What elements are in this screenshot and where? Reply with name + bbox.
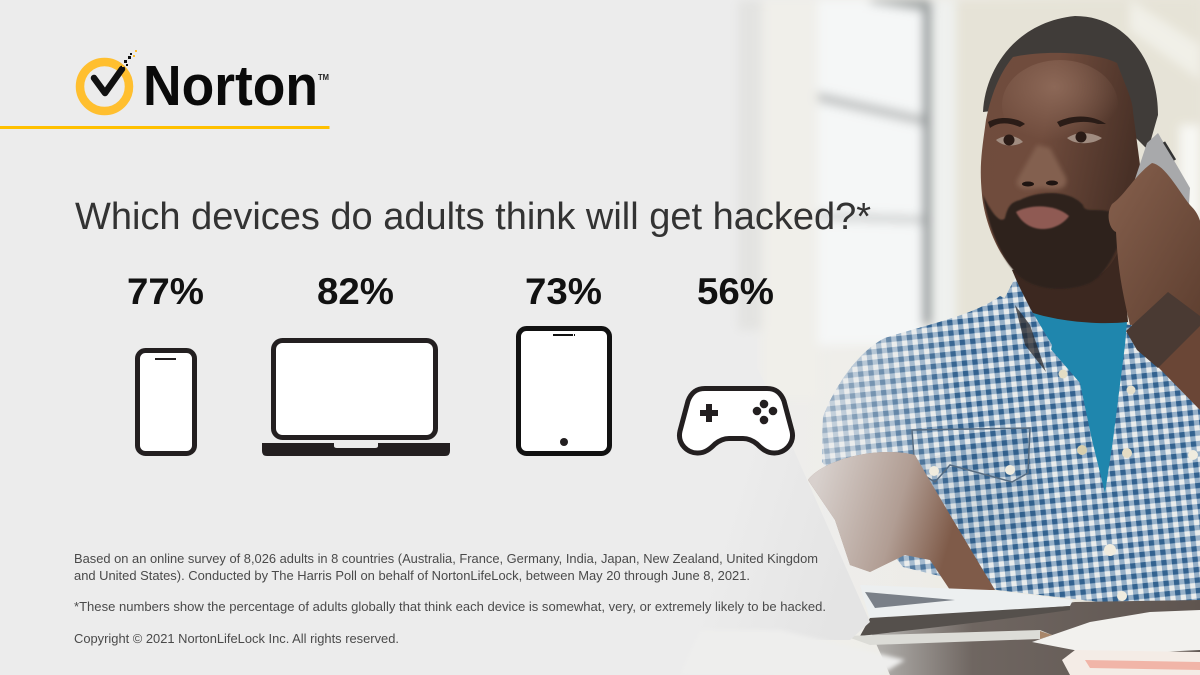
stat: tablet 73%: 73% [525, 271, 602, 312]
leather wristband [1126, 292, 1200, 368]
collar [988, 278, 1052, 375]
icon: tablet [518, 328, 610, 454]
laptop lid [600, 318, 870, 640]
title: Which devices do adults think will get hacked?* [75, 196, 871, 238]
head [981, 53, 1140, 287]
t-shirt [1027, 308, 1127, 493]
stat: phone 77%: 77% [127, 271, 204, 312]
stat: game console 56%: 56% [697, 271, 774, 312]
footnote: asterisk: *These numbers show the percentage of adults globally that think each device is somewhat, very, or extremely likely to be hacked. [74, 599, 826, 614]
yellow rule [0, 126, 330, 129]
nose [1017, 145, 1066, 189]
mouth [1016, 206, 1069, 229]
copyright: Copyright © 2021 NortonLifeLock Inc. All rights reserved. [74, 631, 399, 646]
shirt [822, 296, 1200, 607]
icon: laptop [262, 340, 450, 456]
icon: game controller [679, 388, 793, 453]
laptop [600, 318, 1073, 675]
phone [1117, 133, 1190, 238]
person [808, 16, 1200, 607]
forearm [1130, 280, 1200, 410]
wordmark: Norton [143, 54, 318, 118]
neck [1012, 250, 1128, 323]
hair [983, 16, 1158, 150]
footnote: survey [74, 551, 818, 583]
eyes and brows [988, 116, 1106, 146]
shirt pocket and buttons [912, 370, 1198, 601]
footnote: survey: Based on an online survey of 8,026 adults in 8 countries (Australia, France, Germany, India, Japan, New Zealand, United Kingdom [74, 551, 818, 566]
logo: Norton [80, 50, 329, 118]
table and papers [870, 600, 1200, 675]
footnote: survey: and United States). Conducted by The Harris Poll on behalf of NortonLifeLock, between May 20 through June 8, 2021. [74, 568, 750, 583]
hand on phone [1109, 163, 1200, 325]
paper under laptop [680, 630, 905, 675]
stat: laptop 82%: 82% [317, 271, 394, 312]
check mark with pixels [94, 50, 137, 93]
icon: smartphone [138, 350, 194, 454]
typing hand [808, 452, 995, 590]
beard [983, 193, 1122, 289]
trademark: TM [318, 73, 329, 82]
yellow ring [80, 62, 129, 111]
